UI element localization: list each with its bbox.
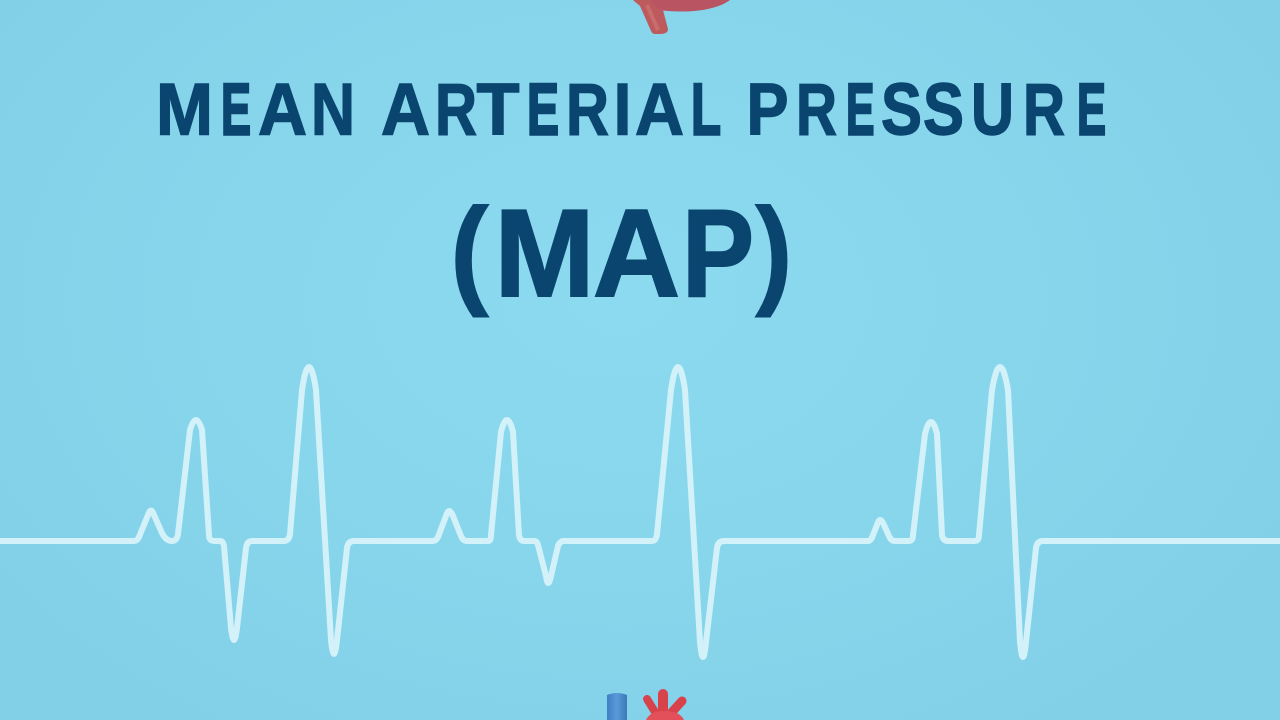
title: MAP abbreviation: P xyxy=(682,185,754,323)
title: Mean Arterial Pressure: R xyxy=(435,70,477,151)
title: Mean Arterial Pressure: R xyxy=(566,70,609,151)
title: Mean Arterial Pressure: N xyxy=(311,70,355,151)
title: Mean Arterial Pressure: U xyxy=(971,70,1014,151)
title: Mean Arterial Pressure: I xyxy=(614,70,631,151)
icon: heart at top edge xyxy=(633,0,730,34)
title: Mean Arterial Pressure: M xyxy=(156,70,213,151)
title: MAP abbreviation: ( xyxy=(449,182,490,318)
title: Mean Arterial Pressure: E xyxy=(846,70,874,151)
icon: red heart and arteries xyxy=(646,694,684,720)
title: MAP abbreviation: M xyxy=(494,185,594,323)
title: Mean Arterial Pressure: L xyxy=(691,70,721,151)
title: Mean Arterial Pressure: R xyxy=(1023,70,1065,151)
title: Mean Arterial Pressure: A xyxy=(635,70,684,151)
title: Mean Arterial Pressure xyxy=(156,70,1106,151)
title: MAP abbreviation: ) xyxy=(754,182,793,318)
title: Mean Arterial Pressure: R xyxy=(796,70,837,151)
title: Mean Arterial Pressure: S xyxy=(923,70,964,151)
title: Mean Arterial Pressure: E xyxy=(221,70,251,151)
title: Mean Arterial Pressure: E xyxy=(1077,70,1106,151)
title: Mean Arterial Pressure: T xyxy=(476,70,520,151)
title: Mean Arterial Pressure: A xyxy=(258,70,307,151)
title: Mean Arterial Pressure: A xyxy=(381,70,430,151)
icon: heart with vessels at bottom edge xyxy=(607,693,684,720)
chart: ECG heartbeat line xyxy=(0,367,1280,657)
title: Mean Arterial Pressure: S xyxy=(881,70,922,151)
icon: blue vessel xyxy=(607,693,627,720)
title: Mean Arterial Pressure: E xyxy=(527,70,559,151)
title: MAP abbreviation xyxy=(449,182,793,323)
title: Mean Arterial Pressure: P xyxy=(746,70,788,151)
title: MAP abbreviation: A xyxy=(593,185,680,323)
